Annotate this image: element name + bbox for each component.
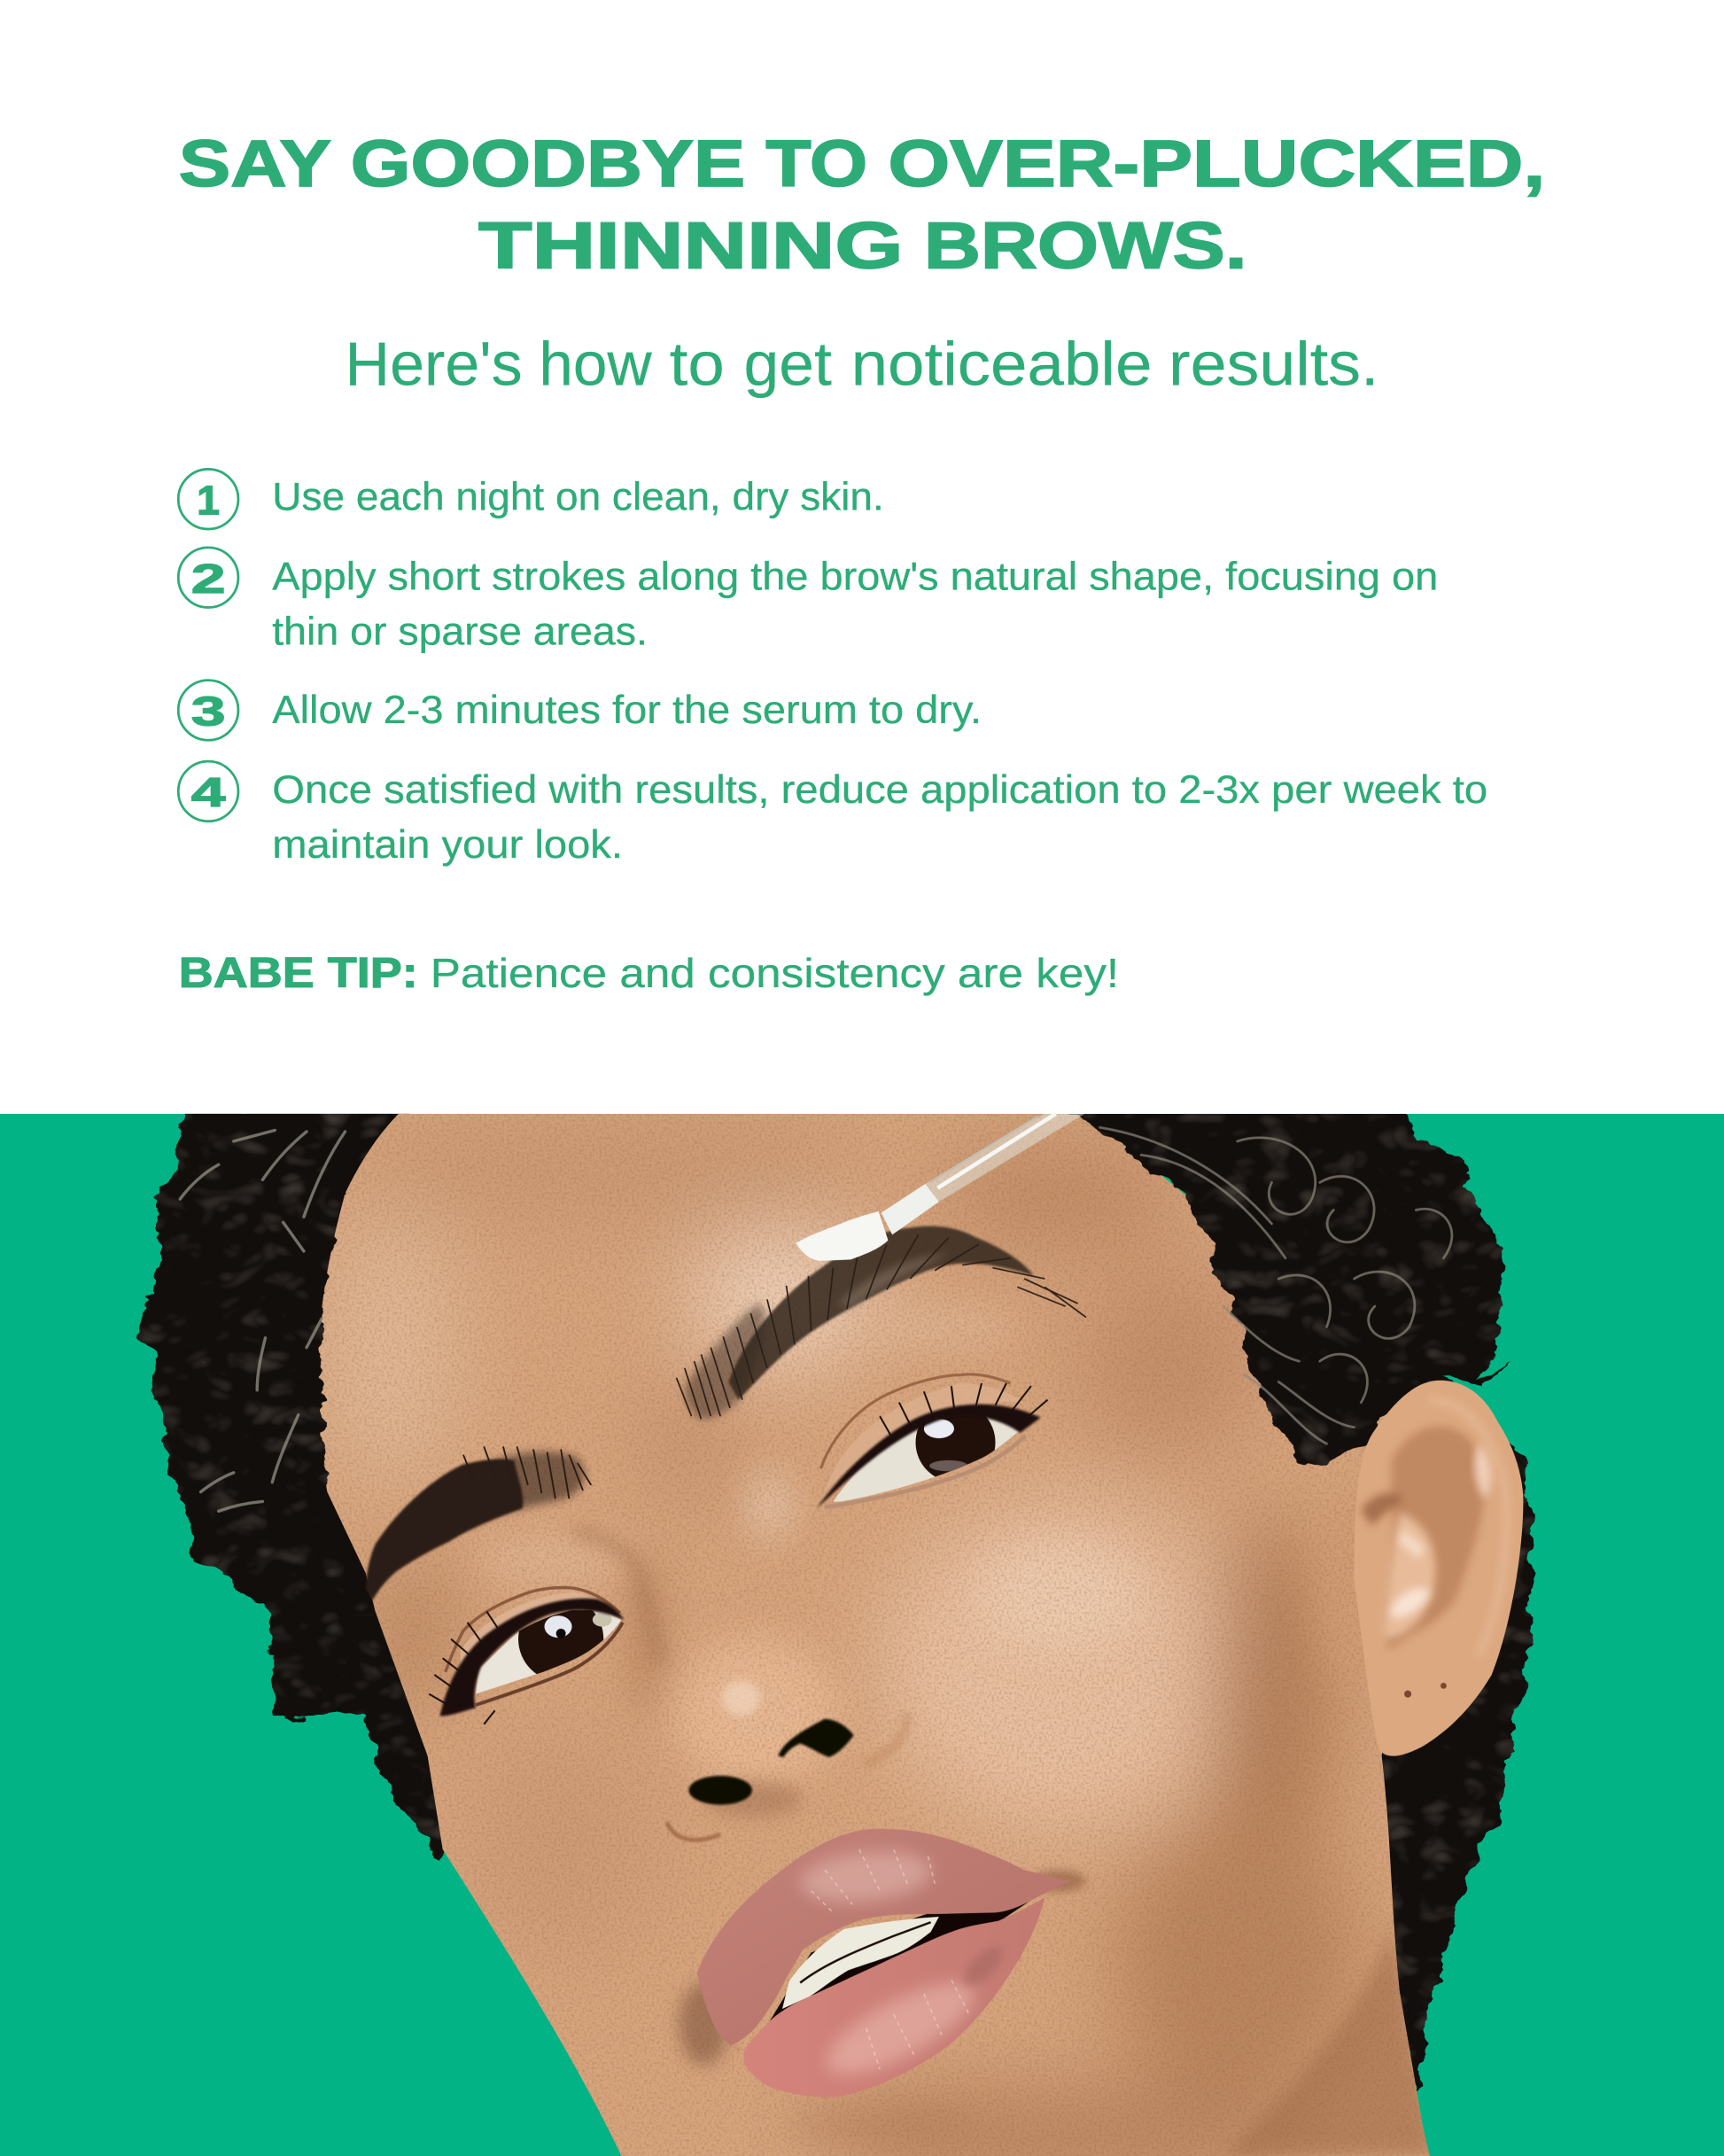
hair behind face	[142, 1107, 1534, 2097]
title	[179, 127, 1545, 283]
title: OVER-PLUCKED,	[888, 127, 1545, 200]
nostril left	[688, 1776, 752, 1805]
photo: woman applying brow serum on green background	[0, 1107, 1724, 2156]
background: white text panel	[0, 0, 1724, 1114]
step 3: 3	[191, 689, 226, 734]
nostril right	[778, 1719, 854, 1757]
upper lip	[697, 1829, 1069, 2051]
babe tip: Patience and consistency are key!	[431, 950, 1119, 996]
left brow	[366, 1446, 591, 1600]
subtitle: how	[539, 329, 652, 398]
babe tip	[179, 949, 1119, 997]
right brow	[677, 1226, 1086, 1419]
left eye	[429, 1588, 625, 1724]
face and neck skin with soft shading	[275, 1114, 1540, 2156]
step 1: Use each night on clean, dry skin.	[272, 476, 884, 519]
socket shadow beside left eye	[573, 1530, 660, 1664]
step 4: maintain your look.	[272, 823, 623, 867]
step 2: thin or sparse areas.	[272, 611, 648, 654]
step 1: 1	[197, 477, 220, 523]
gray hair strands	[180, 1127, 1452, 1511]
lip corner shadow	[680, 1982, 728, 2066]
subtitle: noticeable	[851, 329, 1152, 398]
skin grain	[319, 1114, 1428, 2156]
steps list	[178, 469, 1487, 867]
title: TO	[765, 127, 867, 200]
lower lip	[744, 1897, 1044, 2098]
nose	[667, 1680, 906, 1840]
step 1	[178, 469, 884, 529]
step 2	[178, 548, 1438, 654]
lips	[680, 1829, 1086, 2098]
step 3: Allow 2-3 minutes for the serum to dry.	[272, 689, 982, 732]
green backdrop	[0, 1114, 1724, 2156]
subtitle: get	[744, 329, 832, 398]
step 4: Once satisfied with results, reduce application to 2-3x per week to	[272, 768, 1487, 812]
step 4: 4	[191, 769, 226, 815]
title: GOODBYE	[351, 127, 745, 200]
under-jaw neck shadow	[1231, 1934, 1430, 2156]
step 4	[178, 761, 1487, 867]
step 2: Apply short strokes along the brow's natural shape, focusing on	[272, 556, 1438, 599]
mouth interior	[763, 1900, 1031, 2032]
title: THINNING	[478, 209, 904, 283]
right eye	[817, 1374, 1047, 1508]
ear	[1355, 1381, 1523, 1756]
hair over temple and forehead	[289, 1107, 1507, 1492]
title: SAY	[179, 127, 331, 200]
subtitle: Here's	[346, 329, 523, 398]
step 3	[178, 681, 982, 740]
brow serum applicator	[796, 1114, 1084, 1261]
babe tip: BABE TIP:	[179, 949, 418, 997]
subtitle: results.	[1169, 329, 1378, 398]
teeth	[782, 1917, 939, 2009]
subtitle: to	[670, 329, 725, 398]
title: BROWS.	[924, 209, 1247, 283]
step 2: 2	[191, 556, 226, 602]
subtitle	[346, 329, 1378, 398]
